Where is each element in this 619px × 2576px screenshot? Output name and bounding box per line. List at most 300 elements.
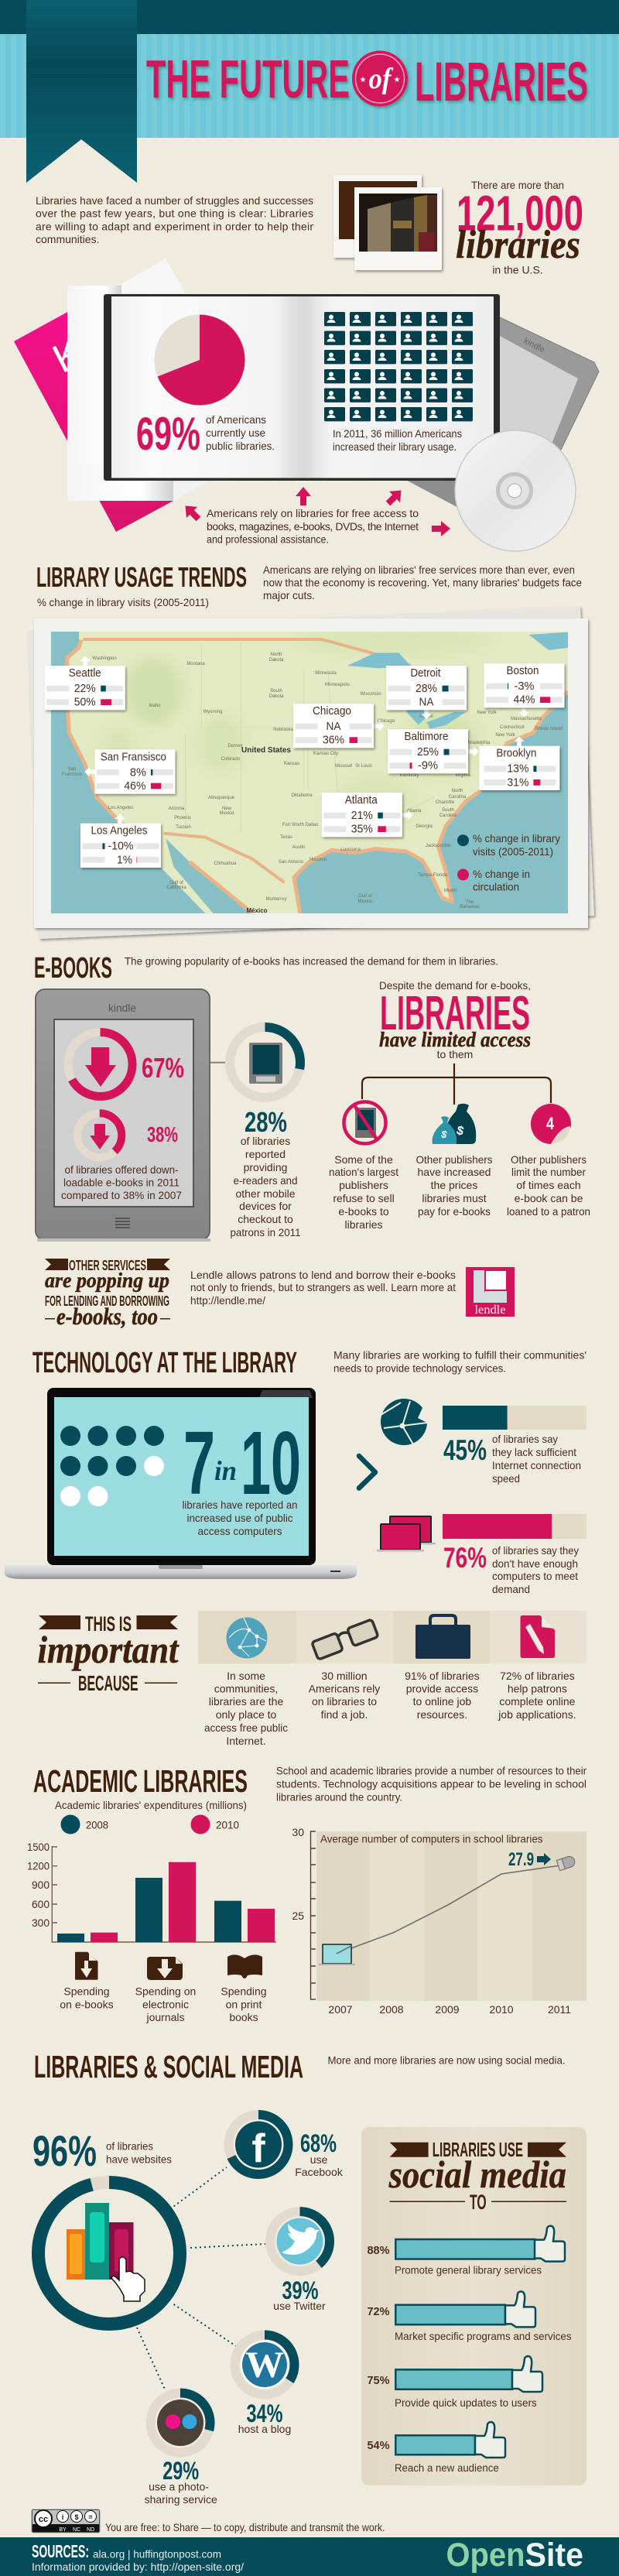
map place labels: South (442, 808, 454, 813)
map place labels: Philadelphia (465, 741, 491, 745)
caption: refuse to sell: Some of the (334, 1153, 393, 1166)
thumb bar: 88% (367, 2226, 565, 2276)
license text: You are free: to Share — to copy, distribute and transmit the work. (105, 2521, 385, 2533)
this is important because heading: BECAUSE (78, 1671, 139, 1695)
panel heading: TO (470, 2191, 487, 2214)
stat: 7 in 10: in (214, 1455, 237, 1486)
bar chart: expenditures: 1200 (27, 1860, 50, 1872)
icon: small laptop (319, 1944, 355, 1965)
heading: libraries have limited access: Despite the demand for e-books, (379, 979, 531, 992)
other services heading: FOR LENDING AND BORROWING (45, 1293, 169, 1309)
map place labels: Kansas City (313, 752, 338, 756)
other services heading: OTHER SERVICES (69, 1258, 146, 1273)
dots: 7 of 10 (60, 1426, 164, 1506)
icon: mouse (556, 1855, 576, 1871)
library services text: and professional assistance. (207, 533, 329, 545)
donut: Twitter 39% (270, 2211, 330, 2271)
caption: find a job: find a job. (321, 1708, 368, 1721)
map place labels: Chicago (378, 719, 395, 724)
US map (62, 625, 568, 914)
caption: limit loans (507, 1153, 590, 1218)
caption: free internet: access free public (204, 1721, 288, 1734)
city card: Baltimore: 25% (417, 745, 439, 759)
city card: Boston: -3% (514, 680, 534, 693)
intro paragraph: communities. (36, 233, 99, 245)
map place labels: Jacksonville (426, 844, 451, 848)
kindle device (36, 989, 210, 1242)
stat: 28% of libraries (231, 1106, 301, 1238)
sources: SOURCES: (32, 2541, 89, 2561)
caption: job resources: to online job (413, 1695, 471, 1708)
technology intro: Many libraries are working to fulfill their communities' (333, 1348, 587, 1361)
map place labels: Colorado (221, 757, 241, 762)
city card: Detroit: 28% (416, 682, 437, 695)
donut: Facebook 68% (229, 2115, 288, 2174)
map panel (28, 606, 594, 939)
computers caption: access computers (198, 1525, 282, 1537)
stat: 96% have websites: 96% (32, 2126, 97, 2175)
lendle logo: lendle (475, 1303, 506, 1317)
map place labels: Miami (444, 889, 457, 893)
map place labels: Austin (292, 845, 305, 850)
stat: 28% of libraries: e-readers and (234, 1174, 297, 1187)
map place labels: Denver (227, 744, 243, 748)
caption: free internet: communities, (214, 1683, 278, 1695)
map place labels: New York (477, 711, 498, 715)
heading: libraries and social media: LIBRARIES & SOCIAL MEDIA (34, 2049, 303, 2084)
line chart: computers in school libraries: 2008 (379, 2003, 404, 2016)
map place labels: Minneapolis (325, 683, 350, 687)
city card: Detroit (386, 666, 467, 710)
other services heading (45, 1258, 170, 1330)
stat: 36 million Americans (333, 427, 462, 453)
caption: free internet: only place to (216, 1708, 277, 1721)
city card: San Fransisco (94, 749, 175, 794)
bar chart title and legend: 2008 (86, 1819, 108, 1831)
stat: 96% have websites: have websites (106, 2153, 172, 2165)
open book (104, 294, 500, 481)
icon: cursor hand (111, 2257, 145, 2301)
chevron arrow (359, 1456, 375, 1488)
bar chart title and legend: 2010 (216, 1819, 239, 1831)
map place labels: Mexico (357, 899, 373, 904)
caption: job resources: 91% of libraries (405, 1670, 480, 1682)
map place labels: South (270, 689, 282, 694)
map place labels: Dakota (268, 658, 284, 663)
thumb bar: 88%: 88% (367, 2244, 390, 2257)
stat: 96% have websites: of libraries (106, 2139, 153, 2152)
e-books intro: The growing popularity of e-books has increased the demand for them in libraries. (125, 955, 498, 968)
city card: Los Angeles (80, 824, 161, 868)
caption: job applications (498, 1670, 576, 1721)
OpenSite logo: Site (525, 2537, 583, 2574)
city card: Seattle: 50% (74, 696, 96, 709)
map place labels: North (271, 653, 282, 657)
map place labels: Idaho (149, 704, 161, 708)
panel: icon strip (198, 1611, 587, 1663)
map place labels: Montana (186, 662, 205, 666)
caption: find a job (309, 1670, 380, 1721)
city card: Los Angeles: 1% (117, 853, 132, 866)
map place labels: Carolina (449, 795, 467, 800)
creative commons badge (32, 2509, 100, 2533)
stat: 28% of libraries: providing (244, 1161, 287, 1173)
loose white pages (67, 259, 209, 501)
line chart: computers in school libraries: 2007 (328, 2003, 353, 2016)
thumb bar: 75%: Provide quick updates to users (395, 2396, 537, 2409)
map place labels: Texas (280, 835, 292, 840)
kindle behind book (398, 315, 599, 511)
stat: 45% internet (443, 1433, 581, 1485)
map place labels: Oklahoma (291, 793, 313, 798)
stat: 69% of Americans (136, 408, 275, 460)
city card: Los Angeles: -10% (108, 840, 133, 853)
map place labels: Chihuahua (214, 862, 237, 866)
caption: increased prices: pay for e-books (418, 1205, 491, 1218)
bar category labels: electronic (142, 1998, 189, 2010)
caption: find a job: 30 million (321, 1670, 368, 1682)
panel heading (388, 2138, 566, 2214)
icon: e-book spending (75, 1952, 97, 1980)
stat: 76% computers: demand (492, 1583, 530, 1595)
map place labels: Tucson (176, 825, 191, 830)
map place labels: Los Angeles (108, 806, 133, 810)
stat: 34% blog: 34% (246, 2400, 283, 2427)
icon: money bags: $ (439, 1128, 449, 1141)
icon: briefcase (416, 1615, 470, 1659)
bar category labels: Spending (63, 1985, 110, 1998)
creative commons badge: ND (87, 2527, 94, 2533)
icon: sticker with 4: 4 (546, 1114, 555, 1133)
people icon grid (324, 312, 473, 421)
city card: Chicago: NA (327, 720, 340, 733)
title: ★ (360, 76, 367, 84)
caption: limit loans: limit the number (511, 1166, 586, 1178)
city card: San Fransisco: 46% (124, 779, 145, 793)
computers caption (183, 1499, 297, 1537)
caption: limit loans: of times each (516, 1179, 581, 1191)
downloadable e-books caption: of libraries offered down- (65, 1163, 179, 1176)
line chart: computers in school libraries: 25 (292, 1910, 304, 1922)
caption: job applications: complete online (499, 1695, 576, 1708)
icon: money bags: $ (455, 1124, 465, 1139)
creative commons badge: NC (73, 2527, 80, 2533)
bar: 76% (443, 1514, 587, 1539)
stat: 45% internet: they lack sufficient (492, 1446, 576, 1458)
icon: e-reader (249, 1043, 282, 1084)
social media intro: More and more libraries are now using social media. (328, 2054, 565, 2067)
stat: 34% blog: host a blog (238, 2423, 291, 2435)
thumb bar: 72% (367, 2291, 572, 2342)
creative commons badge: = (88, 2513, 93, 2521)
icon: print book spending (227, 1954, 262, 1978)
caption: refuse to sell (329, 1153, 398, 1231)
stat: 121,000 libraries: There are more than (471, 179, 564, 191)
stat: 76% computers: of libraries say they (492, 1544, 579, 1557)
stat: 121,000 libraries: libraries (456, 223, 580, 267)
stat: 28% of libraries: of libraries (241, 1135, 290, 1147)
caption: job applications: 72% of libraries (500, 1670, 575, 1682)
kindle device: kindle (108, 1002, 136, 1014)
map place labels: Missouri (335, 764, 352, 769)
main ring with books and cursor (39, 2183, 180, 2324)
map place labels: Francisco (62, 772, 83, 777)
city card: Boston (484, 663, 565, 707)
city card: Baltimore: Baltimore (404, 731, 449, 743)
stat: 28% of libraries: 28% (245, 1106, 287, 1138)
city card: Detroit: NA (419, 696, 433, 709)
city card: Chicago: Chicago (313, 705, 351, 718)
caption: increased prices: Other publishers (416, 1153, 492, 1166)
city card: San Fransisco: 8% (130, 766, 146, 779)
map place labels: Washington (92, 656, 117, 661)
heading: libraries have limited access (379, 979, 531, 1060)
bar category labels: Spending (221, 1985, 267, 1998)
bar chart: expenditures: 1500 (27, 1841, 50, 1853)
line chart: computers in school libraries: 2009 (435, 2003, 460, 2016)
thumb bar: 88%: Promote general library services (395, 2263, 542, 2276)
map place labels: New York (495, 733, 516, 738)
icon: glasses (312, 1619, 378, 1660)
stat: 39% Twitter (273, 2276, 326, 2312)
this is important because heading (37, 1612, 180, 1695)
bar chart: expenditures: 600 (32, 1898, 50, 1910)
stat: 69% of Americans: currently use (206, 426, 265, 439)
library services text: Americans rely on libraries for free access to (207, 507, 419, 519)
map legend (457, 832, 560, 893)
map place labels: St Louis (355, 764, 372, 769)
stat: 76% computers: computers to meet (492, 1570, 578, 1582)
map place labels: Tampa Florida (418, 873, 448, 878)
city card: Seattle: Seattle (69, 667, 101, 680)
caption: find a job: Americans rely (309, 1683, 380, 1695)
caption: increased prices (416, 1153, 492, 1218)
panel: libraries use social media to (361, 2127, 587, 2485)
city card: Atlanta: 35% (351, 823, 373, 836)
connector kindle to donut (210, 1062, 225, 1064)
line chart: computers in school libraries: Average number of computers in school libraries (320, 1833, 543, 1845)
caption: free internet: libraries are the (209, 1695, 283, 1708)
bar category labels: Spending on (135, 1985, 196, 1998)
library services text (207, 507, 419, 545)
caption: find a job: on libraries to (312, 1695, 377, 1708)
bar: 45% (443, 1406, 587, 1430)
footer band (0, 2537, 619, 2576)
stat: 121,000 libraries: in the U.S. (492, 263, 543, 276)
thumb bar: 75% (367, 2356, 542, 2409)
academic intro (276, 1765, 587, 1804)
donut: Facebook 68%: f (251, 2126, 265, 2171)
this is important because heading: THIS IS (85, 1612, 132, 1636)
other services heading: are popping up (45, 1269, 169, 1292)
stat: 121,000 libraries (456, 179, 583, 276)
bar chart: expenditures: 900 (32, 1879, 50, 1891)
city card: Brooklyn: 31% (507, 776, 528, 789)
academic intro: School and academic libraries provide a number of resources to their (276, 1765, 587, 1777)
creative commons badge: BY (59, 2527, 67, 2533)
this is important because heading: important (37, 1628, 180, 1671)
caption: job resources: resources. (417, 1708, 467, 1721)
caption: free internet: In some (227, 1670, 265, 1682)
icon: two laptops (377, 1516, 436, 1551)
stat: 45% internet: speed (492, 1472, 520, 1485)
thumb bar: 72%: 72% (367, 2305, 390, 2318)
stat: 36 million Americans: In 2011, 36 million Americans (333, 427, 462, 440)
downloadable e-books caption: loadable e-books in 2011 (63, 1177, 180, 1189)
map place labels: Mexico (219, 811, 234, 816)
donut: WordPress 34%: W (245, 2345, 284, 2386)
stat: 34% blog (238, 2400, 291, 2435)
caption: free internet (204, 1670, 288, 1747)
map legend: circulation (473, 881, 519, 893)
panel heading: social media (388, 2153, 566, 2196)
intro paragraph: are willing to adapt and experiment in order to help their (36, 220, 313, 232)
map place labels: New (222, 807, 232, 811)
stat: 29% photo sharing: sharing service (145, 2493, 217, 2506)
stat: 28% of libraries: checkout to (238, 1213, 293, 1225)
map place labels: Wyoming (203, 710, 222, 714)
city card: Atlanta (322, 793, 402, 837)
stat: 76% computers: don't have enough (492, 1557, 578, 1570)
stat: 68% Facebook: 68% (300, 2129, 337, 2157)
thumb bar: 75%: 75% (367, 2374, 390, 2387)
city card: Chicago: 36% (323, 734, 344, 747)
map place labels: Phoenix (174, 816, 191, 820)
map place labels: San (68, 767, 76, 772)
usage trends intro (263, 564, 582, 601)
caption: job resources (405, 1670, 480, 1721)
sources (32, 2541, 244, 2573)
donut: 28% e-readers (230, 1027, 300, 1098)
line chart: computers in school libraries (292, 1826, 587, 2016)
usage trends intro: now that the economy is recovering. Yet, many libraries' budgets face (263, 577, 582, 589)
stat: 68% Facebook: use (310, 2153, 327, 2166)
stat: 69% of Americans: of Americans (206, 413, 266, 426)
map place labels: Georgia (416, 824, 433, 829)
donut: 38% (77, 1113, 121, 1157)
line chart: computers in school libraries: 2011 (548, 2003, 571, 2016)
map place labels: Minnesota (315, 671, 337, 676)
bar category labels (60, 1985, 267, 2023)
CD disc (455, 430, 576, 551)
header banner (0, 0, 619, 138)
lendle text: http://lendle.me/ (190, 1294, 265, 1307)
map legend: % change in (473, 868, 530, 880)
stat: 68% Facebook (295, 2129, 344, 2178)
city card arrows (80, 656, 529, 824)
city card: Detroit: Detroit (410, 667, 441, 680)
caption: limit loans: e-book can be (515, 1192, 583, 1204)
icon: network globe (226, 1618, 268, 1658)
map place labels: The (466, 900, 474, 905)
city card: Boston: Boston (506, 665, 539, 677)
map place labels: Houston (310, 858, 327, 862)
line chart: computers in school libraries: 30 (292, 1826, 304, 1838)
caption: increased prices: libraries must (422, 1192, 487, 1204)
creative commons badge: i (62, 2513, 63, 2521)
caption: limit loans: Other publishers (511, 1153, 587, 1166)
kindle behind book: kindle (522, 336, 546, 355)
creative commons badge: cc (39, 2515, 48, 2524)
map place labels: Fort Worth Dallas (282, 823, 318, 827)
city card: Atlanta: Atlanta (345, 794, 378, 807)
donut: Flickr 29% (150, 2393, 210, 2452)
map place labels: Albuquerque (208, 796, 235, 800)
map place labels: Kansas (284, 762, 299, 766)
heading: technology at the library: TECHNOLOGY AT THE LIBRARY (32, 1347, 297, 1379)
downloadable e-books caption: compared to 38% in 2007 (61, 1189, 182, 1201)
stat: 28% of libraries: patrons in 2011 (231, 1226, 301, 1238)
caption: job resources: provide access (406, 1683, 478, 1695)
stat: 29% photo sharing (145, 2457, 217, 2506)
map place labels: Connecticut (500, 725, 525, 730)
academic intro: students. Technology acquisitions appear to be leveling in school (276, 1778, 587, 1790)
stat: 68% Facebook: Facebook (295, 2166, 344, 2178)
intro paragraph: Libraries have faced a number of struggles and successes (36, 194, 313, 207)
stat: 45% internet: of libraries say (492, 1433, 558, 1445)
map place labels (62, 653, 563, 914)
intro paragraph: over the past few years, but one thing is clear: Libraries (36, 207, 313, 220)
lendle text (190, 1269, 456, 1307)
academic intro: libraries around the country. (276, 1791, 402, 1804)
lendle text: not only to friends, but to strangers as well. Learn more at (190, 1281, 456, 1293)
map place labels: Louisiana (340, 848, 361, 852)
city card: Boston: 44% (514, 694, 535, 707)
thumb bar: 54% (367, 2422, 505, 2474)
bar chart title and legend (55, 1799, 247, 1834)
bar chart: expenditures: 300 (32, 1917, 50, 1929)
map place labels: Wisconsin (360, 692, 381, 697)
technology intro (333, 1348, 587, 1375)
pie chart: 69% (155, 314, 245, 406)
map place labels: Kentucky (400, 773, 419, 778)
heading: e-books: E-BOOKS (34, 952, 112, 985)
computers caption: libraries have reported an (183, 1499, 297, 1511)
caption: refuse to sell: libraries (344, 1218, 383, 1231)
bar category labels: books (229, 2011, 258, 2023)
icon: globe (381, 1399, 430, 1445)
pink e-book behind open book (14, 307, 173, 532)
tree connector (362, 1064, 551, 1105)
creative commons badge: $ (74, 2513, 79, 2521)
city card: Seattle (45, 666, 125, 710)
stat: 76% computers: 76% (443, 1542, 487, 1574)
map legend: visits (2005-2011) (473, 845, 553, 858)
map place labels: San Antonio (279, 860, 304, 865)
map subtitle: % change in library visits (2005-2011) (37, 596, 209, 608)
city card: San Fransisco: San Fransisco (101, 751, 166, 763)
city card: Los Angeles: Los Angeles (91, 825, 147, 838)
bar category labels: journals (145, 2011, 185, 2023)
donut: 67% (68, 1033, 132, 1096)
bar chart: expenditures (27, 1841, 276, 1942)
stat: 28% of libraries: reported (245, 1148, 286, 1160)
donut: WordPress 34% (235, 2334, 294, 2395)
bar category labels: on print (226, 1998, 262, 2010)
stat: 7 in 10: 7 (183, 1413, 215, 1513)
caption: increased prices: have increased (418, 1166, 491, 1178)
stat: 45% internet: 45% (443, 1434, 487, 1466)
caption: limit loans: loaned to a patron (507, 1205, 590, 1218)
map place labels: United States (241, 746, 291, 755)
title: THE FUTURE (146, 49, 350, 109)
icon: electronic journals spending (147, 1957, 183, 1980)
city card: Atlanta: 21% (351, 809, 373, 822)
caption: job applications: job applications. (498, 1708, 576, 1721)
caption: refuse to sell: e-books to (338, 1205, 389, 1218)
map place labels: Gulf of (358, 894, 372, 899)
stat: 76% computers (443, 1542, 579, 1595)
